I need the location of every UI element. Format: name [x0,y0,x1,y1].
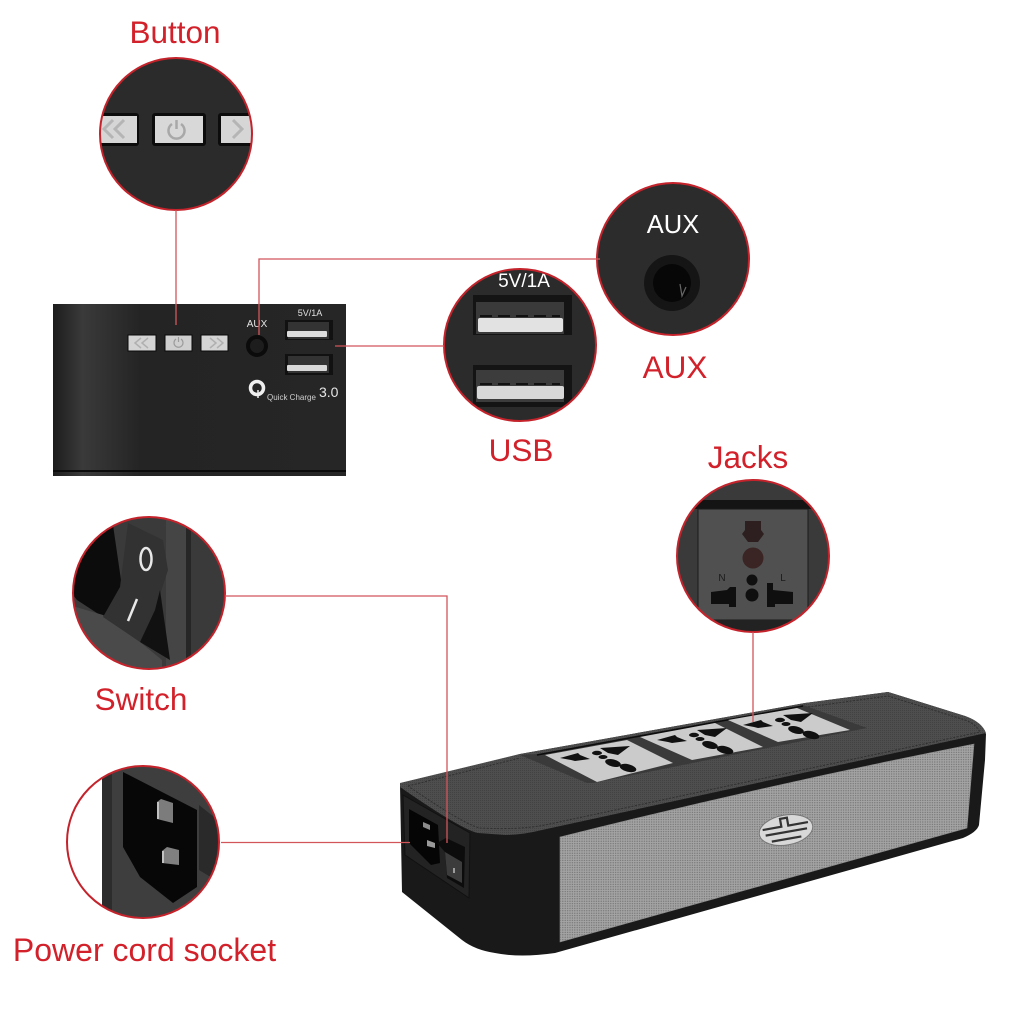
heading: Switch: Switch [95,681,187,717]
control buttons [128,335,228,351]
callout: USB zoom circle: 5V/1A [498,271,550,292]
callout: AUX zoom circle [593,179,753,339]
version number: 3.0 [319,384,339,400]
callout: power cord socket zoom circle [67,762,224,922]
USB ports on panel [285,320,333,375]
brand logo [757,811,815,849]
quick charge text: Quick Charge [267,393,316,402]
socket faces [545,708,850,782]
leather top surface [400,692,986,835]
heading: Button: Button [129,14,221,50]
device body [400,692,986,956]
callout: jacks zoom circle: L [780,573,786,584]
heading: Jacks: Jacks [708,439,788,475]
top stitching [408,696,980,829]
product: power strip speaker [400,692,986,956]
heading: USB: USB [489,432,553,468]
quick charge logo [250,382,264,398]
heading: AUX: AUX [643,349,707,385]
callout: jacks zoom circle [673,476,833,636]
end panel with inlet and switch [403,795,470,898]
callout: USB zoom circle [440,265,600,425]
connector lines [176,210,753,843]
AUX jack [246,335,268,357]
callout: switch zoom circle [69,513,229,675]
5V/1A label on panel: 5V/1A [298,308,322,318]
callout: jacks zoom circle: N [718,573,726,584]
panel: control panel close-up [53,304,346,476]
heading: Power cord socket: Power cord socket [13,932,276,968]
callout: button zoom circle [96,54,258,214]
socket recess [520,705,867,783]
speaker grille [560,744,974,942]
AUX label on panel: AUX [247,319,268,330]
callout: AUX zoom circle: AUX [647,211,699,239]
